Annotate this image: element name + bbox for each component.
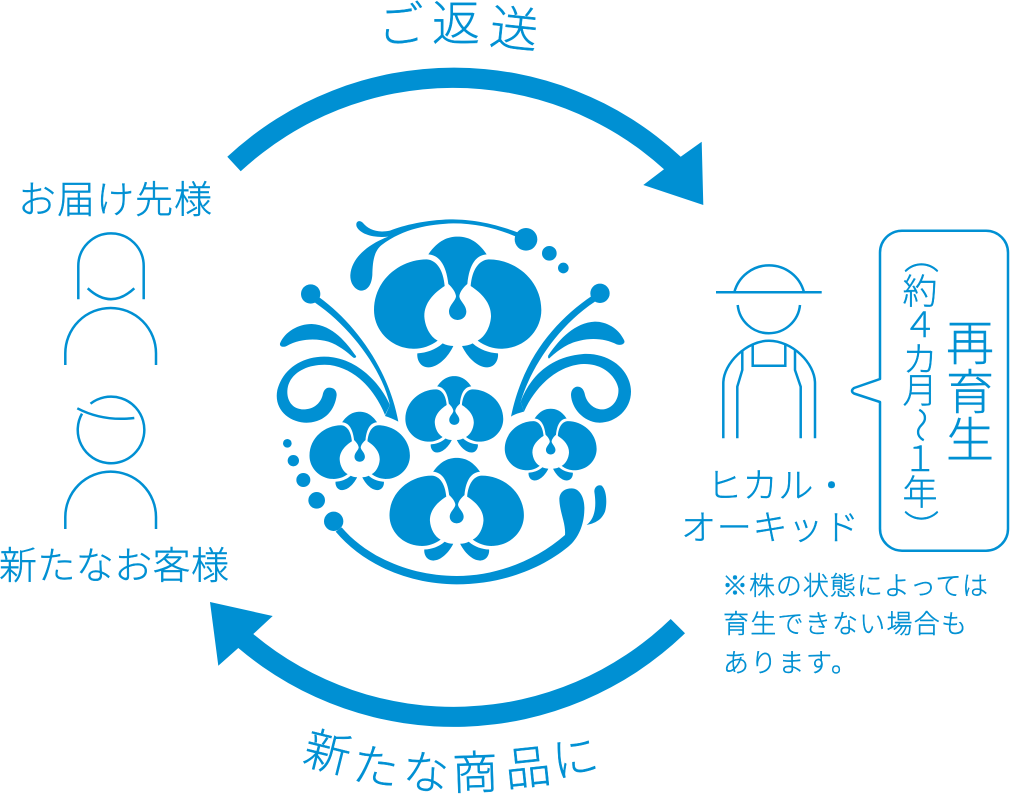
bubble text: 約4カ月〜1年: ）	[900, 509, 939, 545]
bubble text: 約4カ月〜1年: １	[902, 440, 938, 479]
label: 新たな商品に: た	[349, 738, 402, 796]
flourish: left spray	[277, 284, 398, 423]
bubble text: 約4カ月〜1年: ４	[902, 306, 938, 345]
label: ヒカル・オーキッド: ヒカル・	[707, 467, 849, 506]
note text: あります。	[723, 648, 857, 678]
note text: ※株の状態によっては	[722, 571, 988, 601]
bubble text: 約4カ月〜1年: （	[900, 238, 939, 274]
label: 新たな商品に: に	[547, 728, 603, 788]
bubble text: 約4カ月〜1年: 年	[902, 474, 938, 513]
icon: woman customer	[65, 233, 156, 365]
bubble text: 再育生: 生	[946, 415, 994, 468]
label: ヒカル・オーキッド: オーキッド	[681, 509, 859, 548]
orchid: left	[310, 412, 410, 490]
orchid: bottom large	[390, 458, 524, 561]
orchid: right	[505, 409, 597, 480]
bubble text: 再育生	[946, 318, 994, 468]
note text	[722, 571, 988, 678]
bubble text: 約4カ月〜1年: 月	[902, 372, 938, 411]
speech bubble	[852, 231, 1008, 551]
orchid: top large	[374, 237, 541, 367]
label: ご返送: 送	[487, 2, 540, 59]
bubble text: 約4カ月〜1年	[900, 238, 939, 545]
label: ヒカル・オーキッド	[681, 467, 859, 548]
bubble text: 約4カ月〜1年: 〜	[900, 407, 939, 443]
flourish: bottom swirl with dots	[283, 439, 606, 584]
label: ご返送	[375, 0, 540, 59]
label: 新たな商品に: 品	[502, 740, 553, 796]
icon: worker in overalls	[716, 265, 822, 438]
label: 新たな商品に: 新	[299, 722, 356, 784]
bubble text: 約4カ月〜1年: カ	[902, 341, 938, 380]
label: お届け先様: お届け先様	[18, 180, 212, 222]
logo: orchid crest	[277, 219, 631, 584]
icon: new customer	[65, 397, 156, 529]
label: 新たな商品に	[299, 722, 603, 796]
note text: 育生できない場合も	[723, 609, 967, 639]
orchid: centre	[405, 376, 503, 453]
flourish: right spray	[511, 284, 631, 423]
label: 新たなお客様: 新たなお客様	[0, 546, 229, 588]
bubble text: 再育生: 育	[946, 367, 994, 420]
bubble text: 約4カ月〜1年: 約	[902, 273, 938, 312]
flourish: top swirl with dots	[350, 219, 569, 291]
arrow: to new product (bottom)	[210, 602, 685, 727]
arrow: return shipment (top)	[227, 68, 703, 205]
bubble text: 再育生: 再	[946, 318, 994, 371]
